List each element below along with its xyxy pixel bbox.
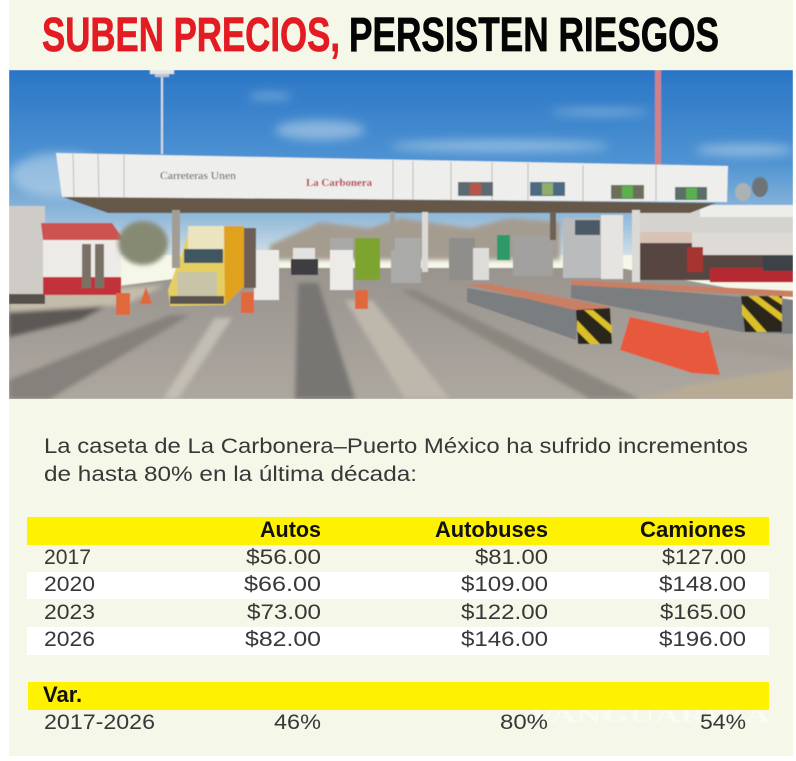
intro text: La caseta de La Carbonera–Puerto México ha sufrido incrementos	[44, 435, 748, 458]
variation row: 80%	[500, 711, 548, 734]
left trailer	[9, 206, 45, 304]
road	[9, 268, 793, 399]
watermark: VANGUARDIA	[530, 705, 771, 727]
far cars	[291, 248, 318, 275]
header row: Camiones	[640, 517, 746, 542]
variation row: 54%	[700, 711, 746, 734]
light pole	[150, 70, 174, 154]
row 2020: $66.00	[244, 573, 321, 596]
clouds	[10, 93, 795, 197]
green truck	[355, 238, 380, 280]
table: prices	[27, 517, 769, 655]
variation header	[28, 682, 769, 710]
yellow truck	[168, 226, 256, 306]
intro text: de hasta 80% en la última década:	[44, 463, 417, 486]
booths	[254, 215, 623, 300]
row 2017: 2017	[44, 546, 91, 569]
row 2026	[27, 627, 769, 655]
row 2020: $148.00	[659, 573, 746, 596]
row 2023: $122.00	[461, 601, 548, 624]
mountains	[270, 218, 560, 260]
row 2023: $73.00	[247, 601, 321, 624]
row 2020	[27, 572, 769, 599]
trees	[118, 221, 168, 265]
row 2023: $165.00	[660, 601, 746, 624]
canopy fascia: Carreteras Unen	[160, 171, 236, 182]
left booth building	[41, 223, 124, 295]
canopy fascia: La Carbonera	[306, 177, 372, 189]
row 2026: $196.00	[659, 628, 746, 651]
canopy fascia	[56, 153, 728, 202]
row 2017: $56.00	[246, 546, 321, 569]
road marks	[9, 283, 793, 399]
variation row: 2017-2026	[44, 711, 155, 734]
variation row: 46%	[274, 711, 321, 734]
antenna	[655, 70, 661, 166]
concrete medians	[464, 280, 793, 340]
row 2023	[44, 601, 746, 624]
variation row	[44, 711, 746, 734]
header row	[27, 517, 769, 545]
row 2017: $81.00	[475, 546, 548, 569]
intro text	[44, 435, 748, 486]
orange barrier	[620, 317, 720, 375]
row 2020: $109.00	[461, 573, 548, 596]
variation header: Var.	[43, 682, 82, 707]
title	[42, 9, 719, 62]
row 2026: $146.00	[461, 628, 548, 651]
chevron barrier left	[576, 308, 612, 344]
row 2017	[44, 546, 746, 569]
row 2026: 2026	[44, 628, 95, 651]
row 2026: $82.00	[245, 628, 321, 651]
columns	[172, 210, 640, 282]
row 2017: $127.00	[662, 546, 746, 569]
sky	[9, 70, 793, 255]
background buildings right	[640, 177, 793, 282]
row 2023: 2023	[44, 601, 95, 624]
table: variation	[28, 682, 769, 734]
photo: toll plaza	[9, 70, 795, 399]
title: SUBEN PRECIOS,	[42, 9, 340, 62]
row 2020: 2020	[44, 573, 95, 596]
canopy underside	[60, 196, 716, 213]
header row: Autobuses	[435, 517, 548, 542]
header row: Autos	[260, 517, 321, 542]
chevron barrier right	[741, 296, 782, 332]
traffic cones	[116, 287, 368, 315]
